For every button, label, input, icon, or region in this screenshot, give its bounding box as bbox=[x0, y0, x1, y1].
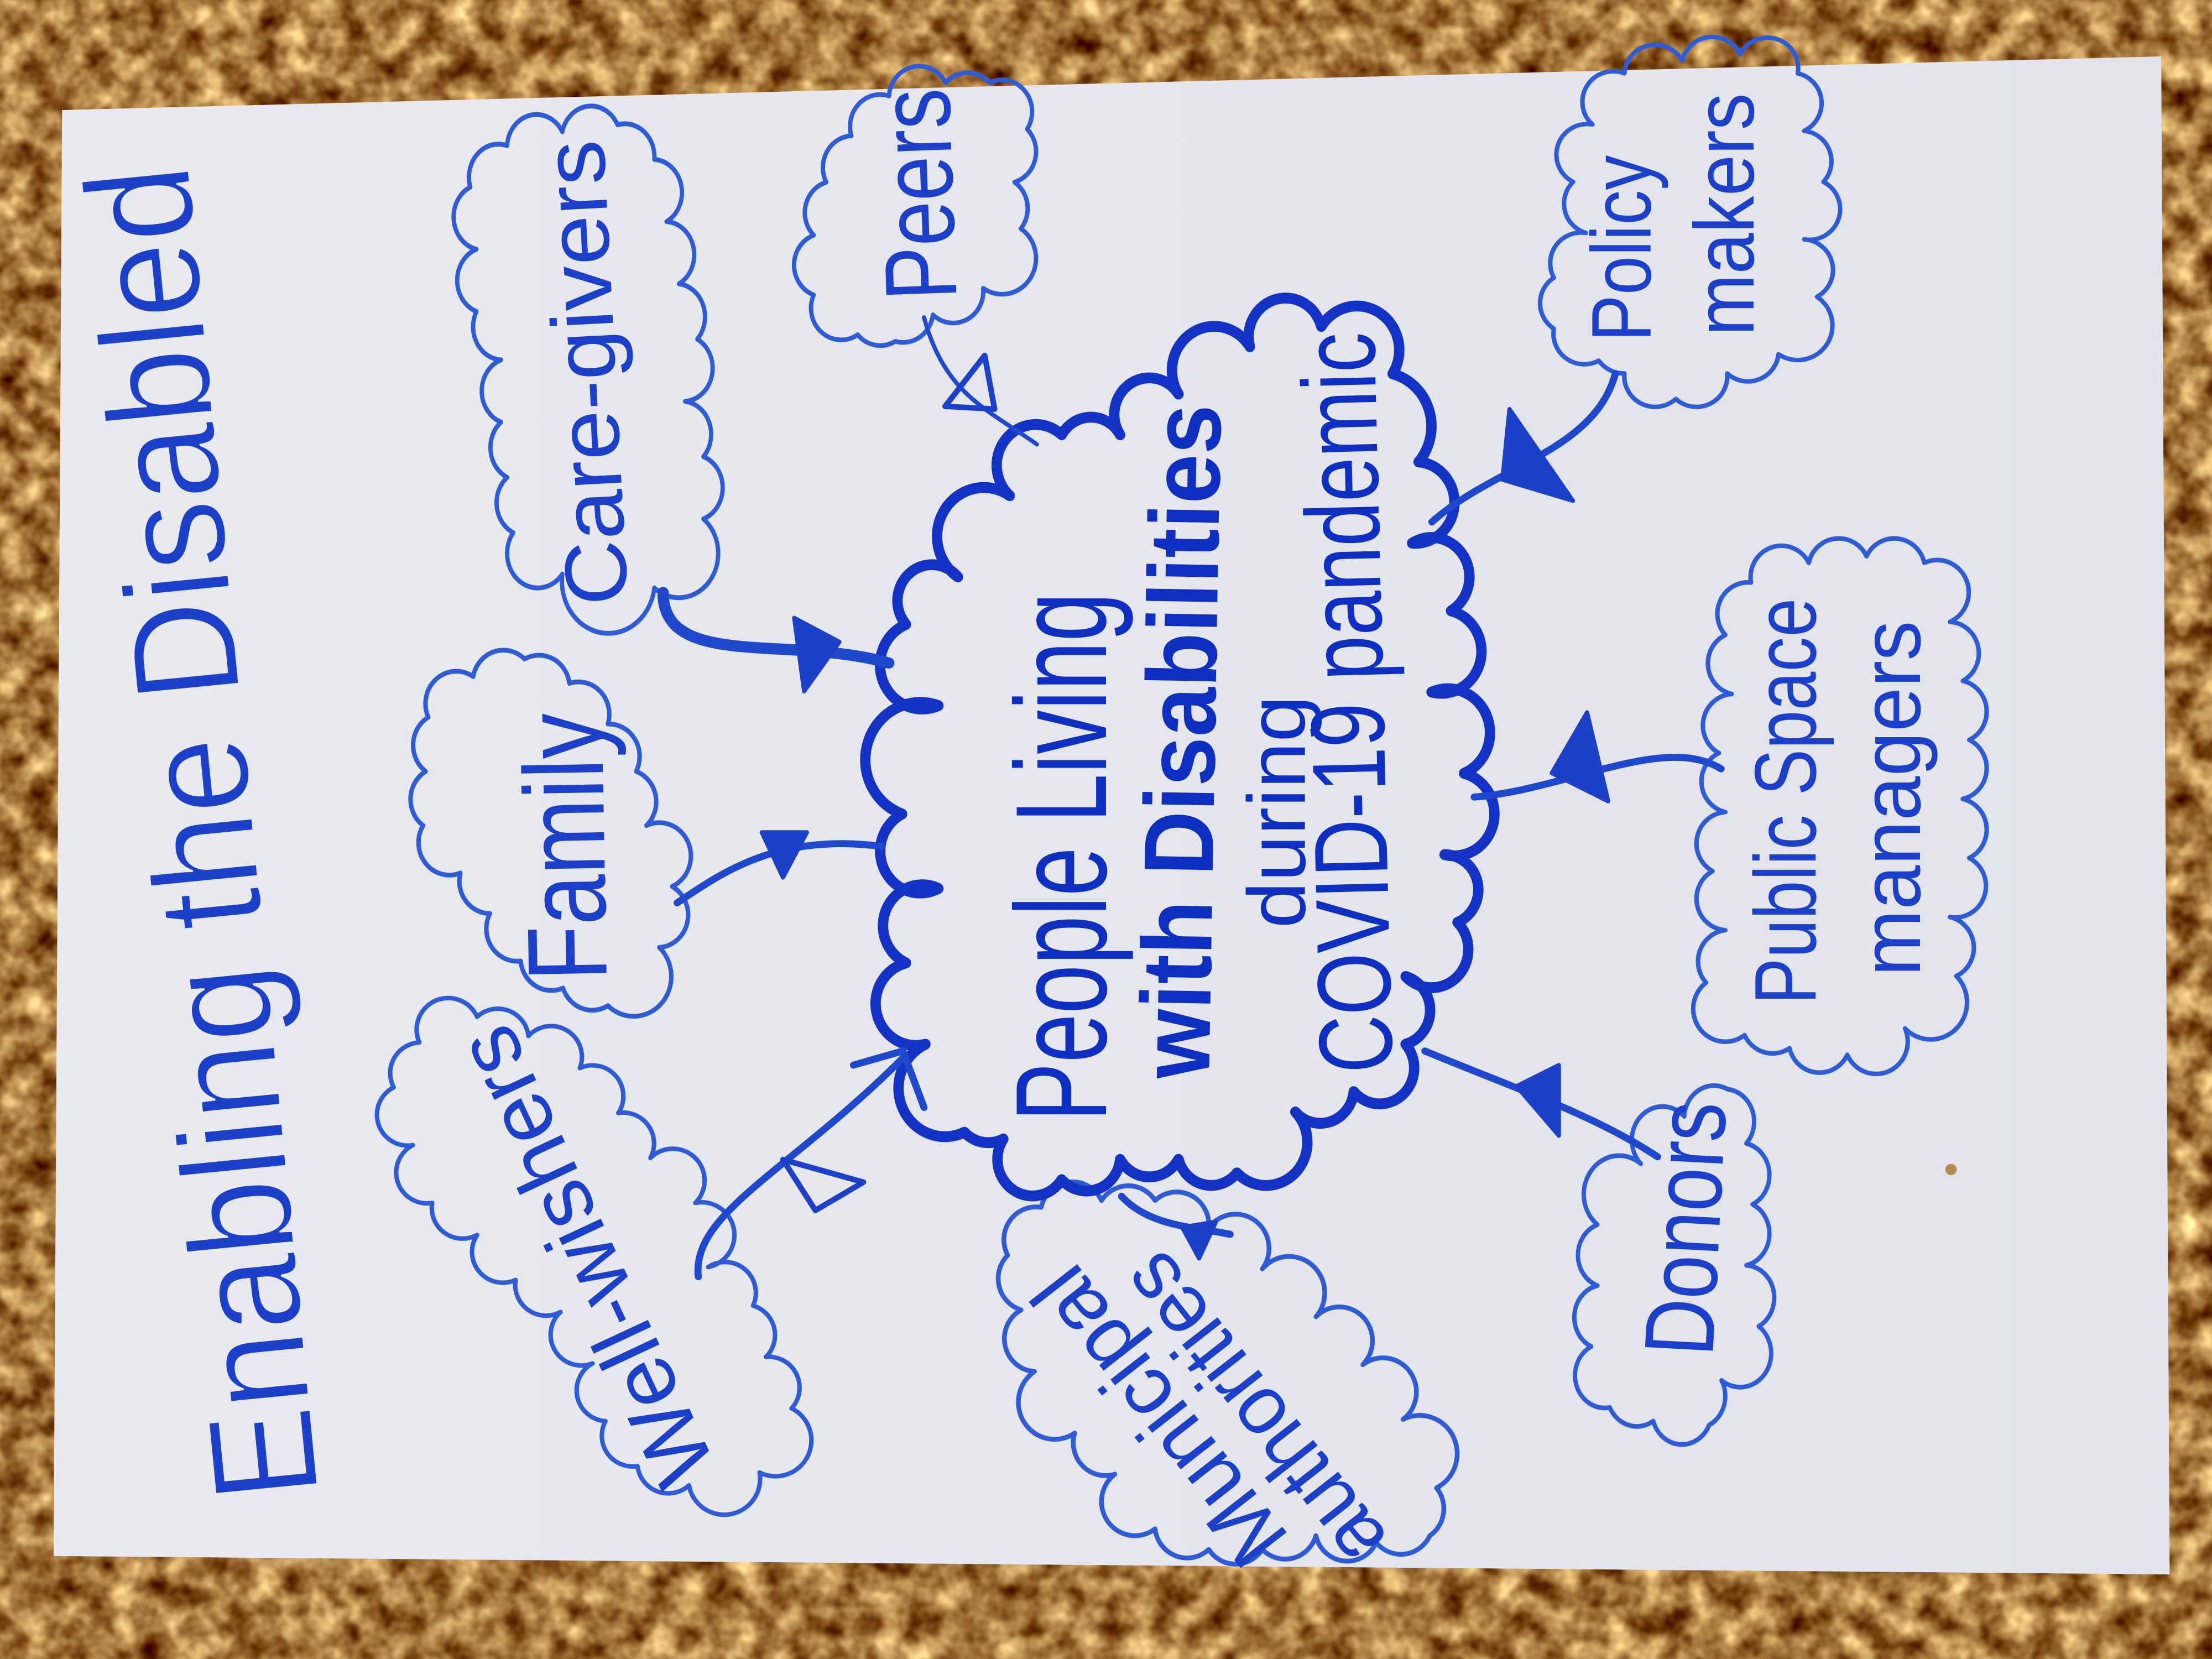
arrow: peers to centre bbox=[924, 317, 1037, 445]
label: during: during bbox=[1232, 696, 1323, 928]
panel: public space managers cloud bbox=[1693, 539, 1987, 1074]
arrow: care-givers to centre bbox=[663, 592, 889, 691]
arrow: municipal authorities to centre bbox=[1121, 1196, 1230, 1259]
panel: well-wishers cloud bbox=[377, 998, 811, 1515]
panel: policy makers cloud bbox=[1540, 37, 1840, 407]
label: municipal: Municipal bbox=[1014, 1249, 1305, 1585]
label: public space: Public Space bbox=[1736, 598, 1834, 1004]
title: Enabling the Disabled bbox=[54, 158, 351, 1509]
label: policy: Policy bbox=[1574, 155, 1669, 341]
panel: family cloud bbox=[410, 650, 691, 1016]
label: covid-19 pandemic: COVID-19 pandemic bbox=[1280, 331, 1415, 1074]
panel: donors cloud bbox=[1574, 1086, 1774, 1444]
label: managers: managers bbox=[1844, 620, 1938, 976]
paper speck bbox=[1945, 1164, 1957, 1175]
arrow: well-wishers to centre bbox=[698, 1051, 924, 1277]
label: family: Family bbox=[500, 712, 631, 982]
panel: central cloud bbox=[865, 298, 1494, 1196]
arrow: public space managers to centre bbox=[1474, 712, 1721, 801]
arrow: donors to centre bbox=[1425, 1051, 1657, 1157]
label: care-givers: Care-givers bbox=[524, 138, 646, 608]
label: with disabilities: with Disabilities bbox=[1119, 404, 1241, 1080]
label: people living: People Living bbox=[989, 592, 1134, 1121]
arrow: family to centre bbox=[677, 832, 881, 903]
panel: municipal authorities cloud bbox=[998, 1182, 1457, 1585]
label: donors: Donors bbox=[1623, 1099, 1747, 1358]
label: authorities: authorities bbox=[1102, 1235, 1404, 1585]
label: well-wishers: Well-wishers bbox=[436, 1011, 734, 1500]
panel: care-givers cloud bbox=[453, 106, 723, 633]
label: makers: makers bbox=[1677, 93, 1772, 336]
panel: peers cloud bbox=[794, 66, 1036, 346]
label: peers: Peers bbox=[857, 87, 978, 302]
arrow: policy makers to centre bbox=[1432, 374, 1615, 522]
